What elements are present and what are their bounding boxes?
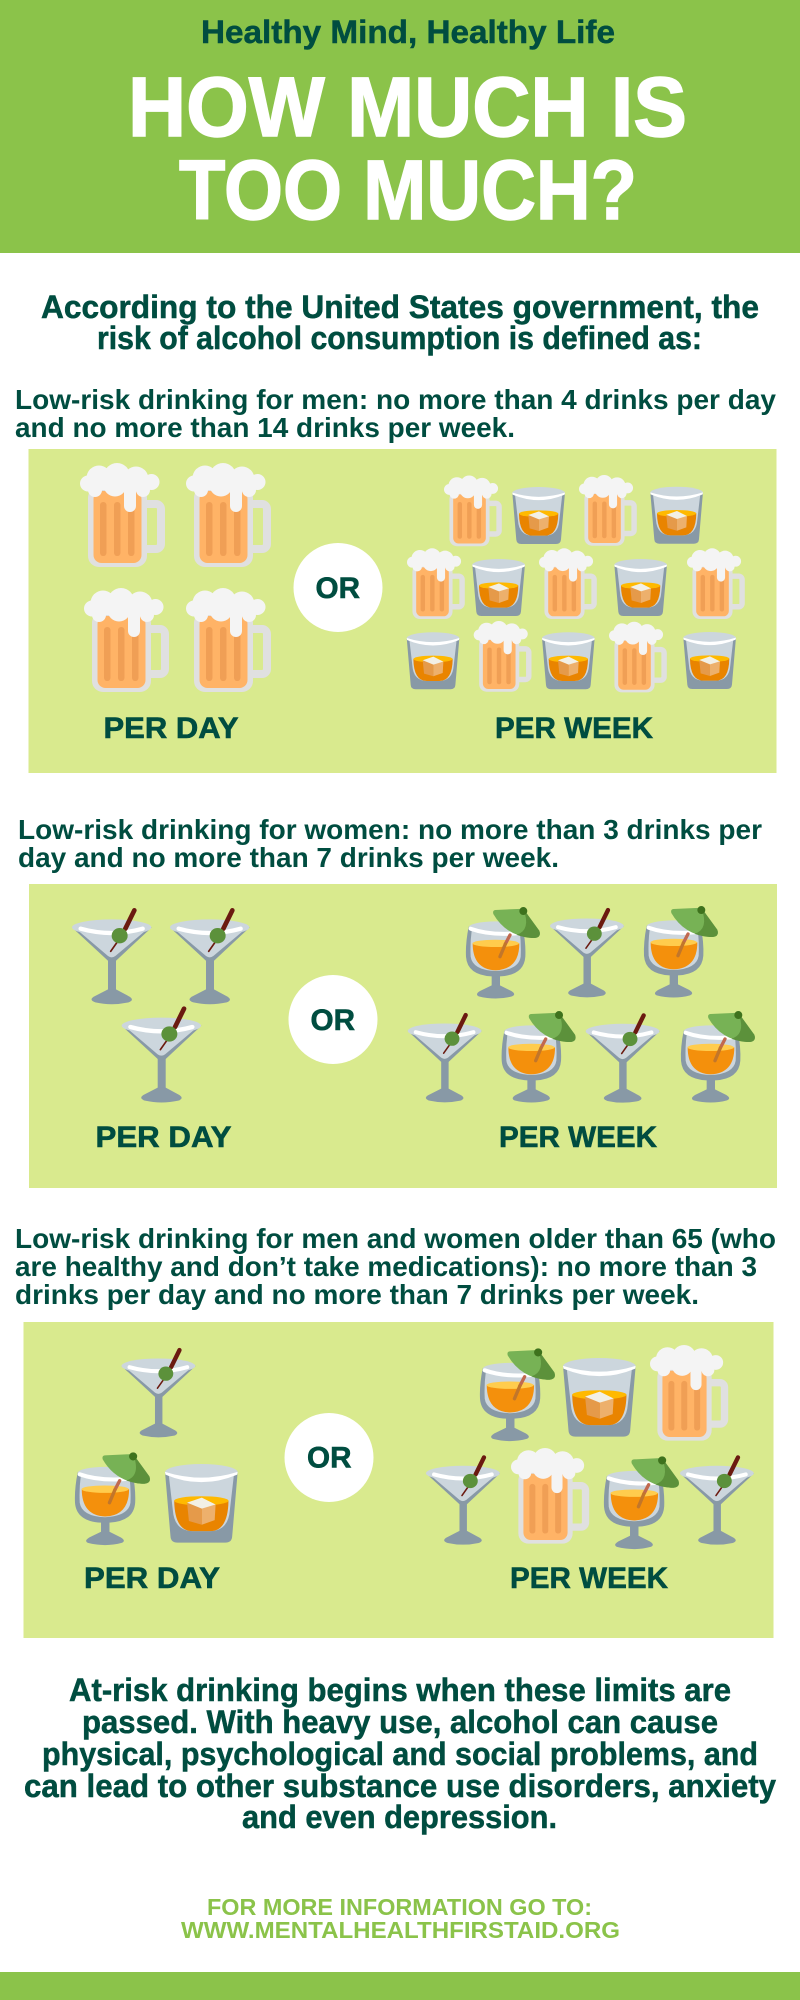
panel: older adults <box>24 1322 774 1638</box>
icons: per day martinis <box>72 910 250 1102</box>
intro heading: According to the United States government, the <box>41 289 759 325</box>
or badge: OR <box>307 1442 352 1474</box>
at-risk paragraph: and even depression. <box>242 1799 557 1835</box>
footer bar <box>0 1972 800 2000</box>
older adults guideline text: Low-risk drinking for men and women older than 65 (who <box>15 1223 776 1254</box>
at-risk paragraph <box>24 1672 776 1835</box>
main title <box>128 60 687 237</box>
label: per day: PER DAY <box>84 1562 220 1595</box>
icons: per day beers <box>80 463 267 692</box>
label: per day: PER DAY <box>104 712 238 745</box>
women guideline text: Low-risk drinking for women: no more than 3 drinks per <box>18 814 762 845</box>
men guideline text: Low-risk drinking for men: no more than 4 drinks per day <box>15 384 776 415</box>
at-risk paragraph: can lead to other substance use disorders, anxiety <box>24 1768 776 1804</box>
label: per week: PER WEEK <box>499 1121 657 1154</box>
or badge: OR <box>310 1004 355 1037</box>
women guideline text: day and no more than 7 drinks per week. <box>18 842 559 873</box>
men guideline text <box>15 384 776 443</box>
more information link text: WWW.MENTALHEALTHFIRSTAID.ORG <box>181 1917 620 1943</box>
or badge: OR <box>316 572 360 605</box>
more information link text <box>181 1894 620 1943</box>
panel: men <box>28 449 776 773</box>
intro heading <box>41 289 759 356</box>
or badge <box>284 1413 374 1502</box>
intro heading: risk of alcohol consumption is defined as: <box>97 320 702 356</box>
women guideline text <box>18 814 762 873</box>
or badge <box>294 543 382 632</box>
icons: per week drinks <box>407 475 742 692</box>
at-risk paragraph: At-risk drinking begins when these limits are <box>69 1672 731 1708</box>
icons: per week drinks <box>426 1345 754 1549</box>
panel: women <box>29 884 777 1188</box>
main title: TOO MUCH? <box>179 143 637 237</box>
older adults guideline text: drinks per day and no more than 7 drinks per week. <box>15 1279 699 1310</box>
at-risk paragraph: passed. With heavy use, alcohol can cause <box>82 1704 718 1740</box>
header subtitle: Healthy Mind, Healthy Life <box>201 14 615 50</box>
header banner <box>0 0 800 253</box>
icons: per day drinks <box>75 1350 238 1545</box>
older adults guideline text: are healthy and don’t take medications): no more than 3 <box>15 1251 757 1282</box>
men guideline text: and no more than 14 drinks per week. <box>15 412 515 443</box>
label: per week: PER WEEK <box>495 712 653 745</box>
or badge <box>288 975 378 1064</box>
icons: per week drinks <box>408 906 755 1103</box>
label: per day: PER DAY <box>96 1121 232 1154</box>
older adults guideline text <box>15 1223 776 1310</box>
more information link text: FOR MORE INFORMATION GO TO: <box>207 1894 592 1920</box>
main title: HOW MUCH IS <box>128 60 687 154</box>
label: per week: PER WEEK <box>510 1562 668 1595</box>
at-risk paragraph: physical, psychological and social problems, and <box>42 1736 758 1772</box>
